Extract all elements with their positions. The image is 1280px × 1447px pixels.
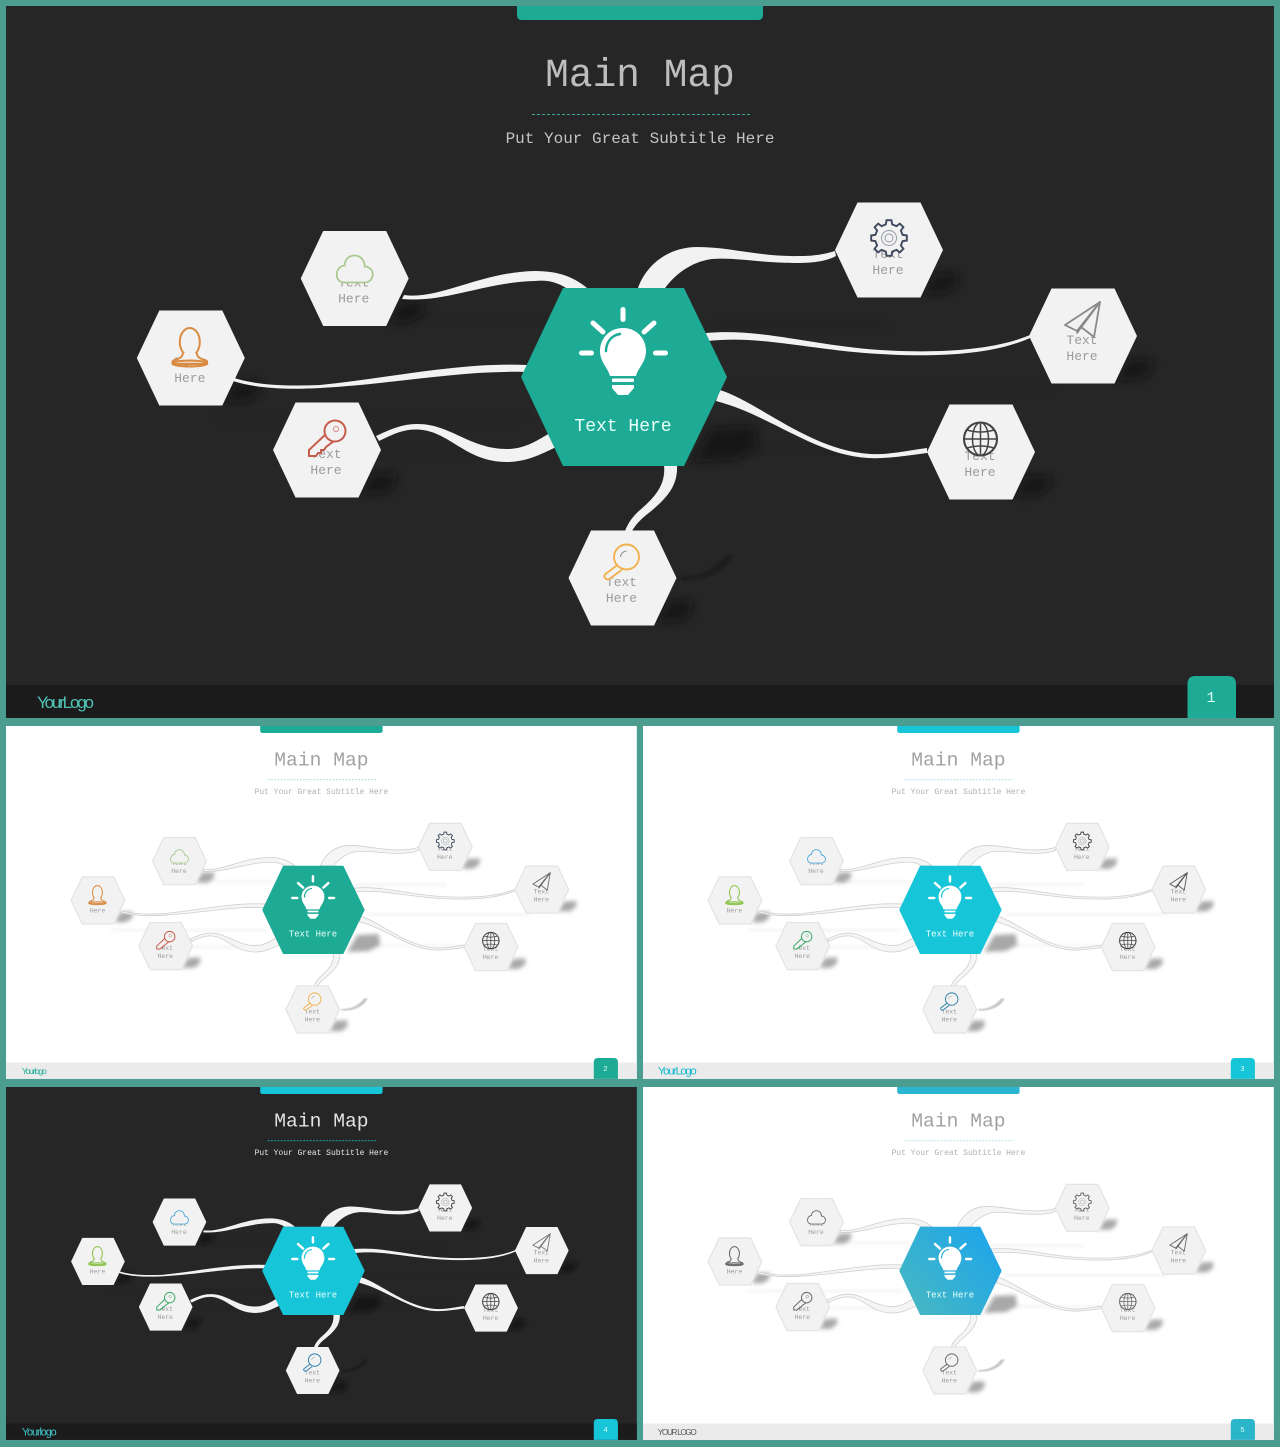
slide 3 subtitle: Put Your Great Subtitle Here [892, 788, 1025, 797]
slide 4 connector ribbons [119, 1206, 515, 1347]
central label: Text Here [289, 930, 337, 940]
node: globe: Text [483, 1307, 498, 1314]
slide 3 central hexagon [899, 866, 1002, 954]
node: person [708, 1238, 762, 1285]
slide 2 shadow streaks [110, 881, 530, 948]
node: globe: Here [483, 1315, 498, 1322]
slide 5 hexagon shadows [751, 1219, 1214, 1392]
node: magnifier [923, 1347, 977, 1394]
node: key: Text [157, 945, 173, 952]
slide 4 tail shadow [341, 1359, 368, 1372]
node: key: Here [157, 1314, 173, 1321]
node: cloud: Here [808, 1229, 824, 1236]
slide 5 footer bar [643, 1424, 1274, 1440]
node: key: Text [157, 1306, 173, 1313]
node: paper plane: Here [1066, 349, 1098, 364]
node: person [708, 877, 762, 924]
node: cloud: Text [171, 860, 187, 867]
node: paper plane: Text [1066, 333, 1098, 348]
node: key: Here [310, 463, 342, 478]
node: person [137, 310, 245, 406]
node: globe: Here [483, 954, 498, 961]
node: paper plane [1029, 288, 1137, 384]
slide 4 title: Main Map [274, 1111, 369, 1133]
node: magnifier: Text [304, 1369, 320, 1376]
node: cloud [790, 1199, 843, 1246]
slide 1 connector ribbons [233, 247, 1030, 531]
slide 5 dashed divider [905, 1140, 1013, 1142]
node: person [71, 1238, 125, 1285]
slide 2 dashed divider [268, 779, 376, 781]
slide 3 hexagon shadows [751, 858, 1214, 1031]
slide 1 logo: YourLogo [37, 693, 94, 712]
node: gear: Here [872, 263, 904, 278]
node: key [776, 923, 830, 970]
node: paper plane: Here [534, 1257, 549, 1264]
node: cloud: Text [171, 1221, 187, 1228]
node: magnifier [286, 986, 340, 1033]
node: key: Here [794, 953, 810, 960]
node: key [273, 402, 381, 498]
node: cloud [790, 838, 843, 885]
node: gear: Text [1074, 846, 1090, 853]
node: globe: Here [1120, 1315, 1135, 1322]
node: gear [418, 823, 472, 870]
node: person: Text [727, 899, 742, 906]
slide 3 top tab [897, 726, 1020, 733]
slide 5 central hexagon [899, 1227, 1002, 1315]
central label: Text Here [289, 1291, 337, 1301]
slide 2 subtitle: Put Your Great Subtitle Here [255, 788, 388, 797]
node: person: Here [174, 371, 205, 386]
slide 5 page number: 5 [1240, 1427, 1245, 1435]
node: magnifier [568, 530, 676, 626]
node: key [139, 923, 193, 970]
node: magnifier: Here [941, 1016, 957, 1023]
slide 3 shadow streaks [747, 881, 1167, 948]
node: paper plane [515, 1227, 569, 1274]
node: key: Text [794, 945, 810, 952]
node: magnifier: Text [606, 575, 637, 590]
slide 5 shadow streaks [747, 1242, 1167, 1309]
icon: light bulb [291, 875, 335, 919]
node: key: Here [157, 953, 173, 960]
node: cloud: Here [808, 868, 824, 875]
node: globe [464, 1284, 518, 1332]
node: globe [1101, 923, 1155, 971]
central label: Text Here [574, 417, 672, 437]
node: cloud [153, 838, 206, 885]
slide 2 top tab [260, 726, 383, 733]
node: gear [418, 1184, 472, 1231]
node: cloud: Here [171, 1229, 187, 1236]
slide 1 central hexagon [521, 288, 727, 466]
node: magnifier: Text [941, 1369, 957, 1376]
node: paper plane: Here [1171, 896, 1186, 903]
slide 3 dashed divider [905, 779, 1013, 781]
node: paper plane: Here [1171, 1257, 1186, 1264]
node: gear: Here [437, 854, 453, 861]
slide 2 page tab [594, 1058, 618, 1079]
node: paper plane [515, 866, 569, 913]
slide 3 footer bar [643, 1063, 1274, 1079]
node: globe: Text [1120, 946, 1135, 953]
node: globe: Text [964, 449, 996, 464]
slide 1 hexagon shadows [224, 273, 1153, 622]
node: paper plane [1152, 1227, 1206, 1274]
slide 5 top tab [897, 1087, 1020, 1094]
node: person: Here [727, 1268, 742, 1275]
node: gear: Text [1074, 1207, 1090, 1214]
slide 3 page tab [1231, 1058, 1255, 1079]
node: person [71, 877, 125, 924]
slide 2 hexagon shadows [114, 858, 577, 1031]
node: gear: Text [437, 1207, 453, 1214]
node: paper plane: Text [534, 889, 549, 896]
node: magnifier: Text [304, 1008, 320, 1015]
node: globe: Here [964, 465, 996, 480]
icon: light bulb [928, 875, 972, 919]
slide 2 logo: Yourlogo [22, 1066, 47, 1076]
slide 3 page number: 3 [1240, 1066, 1245, 1074]
slide 2 page number: 2 [603, 1066, 608, 1074]
slide 4: dark with cyan [6, 1087, 637, 1440]
node: globe: Text [483, 946, 498, 953]
slide 4 subtitle: Put Your Great Subtitle Here [255, 1149, 388, 1158]
node: paper plane: Text [534, 1250, 549, 1257]
slide 5: white with blue gradient [643, 1087, 1274, 1440]
node: magnifier: Here [606, 591, 637, 606]
node: magnifier: Text [941, 1008, 957, 1015]
slide 4 page tab [594, 1419, 618, 1440]
node: key [776, 1284, 830, 1331]
slide 2 tail shadow [341, 998, 368, 1011]
node: cloud [153, 1199, 206, 1246]
slide 1 background [6, 6, 1274, 718]
slide 5 subtitle: Put Your Great Subtitle Here [892, 1149, 1025, 1158]
node: paper plane: Text [1171, 1250, 1186, 1257]
node: cloud: Here [171, 868, 187, 875]
node: person: Here [727, 907, 742, 914]
node: paper plane: Here [534, 896, 549, 903]
slide 5 tail shadow [978, 1359, 1005, 1372]
node: person: Text [727, 1260, 742, 1267]
node: person: Here [90, 907, 105, 914]
node: cloud: Text [808, 1221, 824, 1228]
slide 1 page tab [1188, 676, 1236, 718]
slide 4 background [6, 1087, 637, 1440]
slide 4 shadow streaks [110, 1242, 530, 1309]
node: gear: Here [437, 1215, 453, 1222]
node: magnifier [923, 986, 977, 1033]
slide 4 logo: Yourlogo [22, 1426, 57, 1438]
node: key: Text [310, 447, 342, 462]
slide 3 background [643, 726, 1274, 1079]
icon: light bulb [291, 1236, 335, 1280]
node: key: Here [794, 1314, 810, 1321]
slide 1: large dark map [6, 6, 1274, 718]
node: magnifier: Here [304, 1377, 320, 1384]
node: cloud: Here [338, 292, 369, 306]
node: person: Text [90, 1260, 105, 1267]
icon: light bulb [579, 307, 668, 395]
slide 4 footer bar [6, 1424, 637, 1440]
slide 1 title: Main Map [545, 53, 735, 98]
node: gear [1055, 823, 1109, 870]
node: magnifier [286, 1347, 340, 1394]
node: gear [1055, 1184, 1109, 1231]
slide 1 shadow streaks [215, 318, 1060, 454]
slide 1 footer bar [6, 685, 1274, 718]
slide 3 title: Main Map [911, 750, 1006, 772]
slide 1 subtitle: Put Your Great Subtitle Here [506, 130, 774, 148]
slide 2 footer bar [6, 1063, 637, 1079]
slide 1 dashed divider [532, 114, 750, 116]
node: key [139, 1284, 193, 1331]
central label: Text Here [926, 930, 974, 940]
slide 1 top tab [517, 6, 763, 20]
node: paper plane [1152, 866, 1206, 913]
node: gear: Text [437, 846, 453, 853]
slide 4 dashed divider [268, 1140, 376, 1142]
node: person: Here [90, 1268, 105, 1275]
slide 3 logo: YourLogo [658, 1065, 697, 1077]
slide 2: white with teal [6, 726, 637, 1079]
slide 5 background [643, 1087, 1274, 1440]
node: globe [464, 923, 518, 971]
node: person: Text [174, 355, 205, 370]
node: cloud: Text [808, 860, 824, 867]
slide 4 central hexagon [262, 1227, 365, 1315]
central label: Text Here [926, 1291, 974, 1301]
slide 3 tail shadow [978, 998, 1005, 1011]
slide 1 page number: 1 [1206, 690, 1216, 707]
icon: light bulb [928, 1236, 972, 1280]
slide 2 background [6, 726, 637, 1079]
node: globe: Text [1120, 1307, 1135, 1314]
slide 5 page tab [1231, 1419, 1255, 1440]
node: cloud: Text [338, 276, 369, 290]
node: paper plane: Text [1171, 889, 1186, 896]
slide 5 connector ribbons [756, 1206, 1152, 1347]
node: globe [1101, 1284, 1155, 1332]
slide 2 connector ribbons [119, 845, 515, 986]
slide 1 tail shadow [680, 555, 733, 580]
node: key: Text [794, 1306, 810, 1313]
node: gear [835, 202, 943, 298]
slide 5 title: Main Map [911, 1111, 1006, 1133]
node: gear: Text [872, 247, 904, 262]
node: cloud [301, 231, 409, 326]
slide 4 hexagon shadows [114, 1219, 577, 1392]
slide 5 logo: YOUR LOGO [658, 1428, 697, 1437]
slide 2 central hexagon [262, 866, 365, 954]
node: person: Text [90, 899, 105, 906]
node: gear: Here [1074, 854, 1090, 861]
node: gear: Here [1074, 1215, 1090, 1222]
node: globe: Here [1120, 954, 1135, 961]
slide 4 page number: 4 [603, 1427, 608, 1435]
node: magnifier: Here [941, 1377, 957, 1384]
node: globe [927, 404, 1035, 500]
node: magnifier: Here [304, 1016, 320, 1023]
slide 2 title: Main Map [274, 750, 369, 772]
slide 4 top tab [260, 1087, 383, 1094]
slide 3 connector ribbons [756, 845, 1152, 986]
slide 3: white with cyan [643, 726, 1274, 1079]
